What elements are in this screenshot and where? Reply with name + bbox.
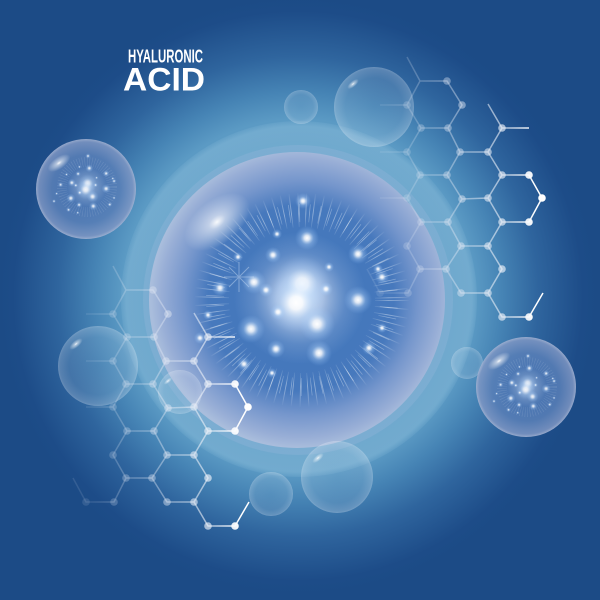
bubble: top small (284, 90, 318, 124)
bubble rays (62, 162, 112, 212)
sphere highlight (174, 181, 260, 263)
bubble highlight (485, 349, 513, 373)
bubble stars (52, 153, 116, 214)
core glow (234, 232, 366, 364)
bubble core (67, 167, 107, 207)
sparkle flare (224, 262, 254, 292)
bubble: left large (58, 326, 138, 406)
bubble rays (502, 362, 552, 412)
hexagon lattice: lower left (73, 266, 252, 530)
title line 2: ACID (123, 62, 205, 98)
bubble: top large (334, 67, 414, 147)
star sparkles (194, 193, 389, 378)
star bubble: right (476, 337, 576, 437)
bubble highlight (45, 151, 73, 175)
title (123, 46, 205, 98)
bubble core (507, 367, 547, 407)
bubble stars (492, 353, 556, 414)
radial rays (212, 210, 392, 390)
bubble: bottom centre (301, 441, 373, 513)
bubble: bottom small (249, 472, 293, 516)
bubble highlight (163, 376, 173, 386)
bubble: lower left small (158, 370, 202, 414)
hexagon lattice: upper right (367, 57, 546, 321)
inner halo band (143, 145, 453, 455)
main sphere (149, 152, 445, 448)
bubble highlight (68, 336, 84, 352)
bubble highlight (311, 451, 325, 465)
bubble highlight (346, 77, 360, 91)
outer halo ring (121, 121, 477, 477)
bubble: right small (451, 347, 483, 379)
title line 1: HYALURONIC (128, 46, 203, 66)
star bubble: left (36, 139, 136, 239)
